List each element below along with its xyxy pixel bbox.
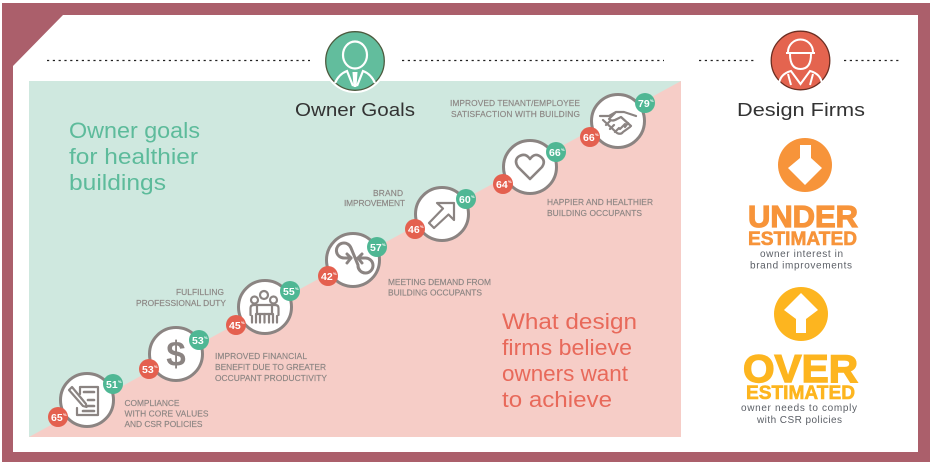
label: compliance: COMPLIANCE (124, 398, 180, 408)
goal 3: professional duty: 55 (283, 286, 295, 298)
label: happier occupants: BUILDING OCCUPANTS (547, 208, 642, 218)
label: professional duty: PROFESSIONAL DUTY (136, 298, 226, 308)
label: financial benefit (215, 351, 327, 383)
goal 2: financial benefit (139, 328, 209, 380)
text: what design firms believe owners want to achieve (502, 309, 637, 412)
heading: Owner Goals: Owner Goals (295, 99, 415, 120)
label: tenant satisfaction: SATISFACTION WITH BUILDING (451, 109, 580, 119)
goal 3: professional duty: 45 (229, 320, 241, 332)
callout: overestimated: OVER (743, 348, 858, 391)
panel: design firm beliefs diagonal (29, 81, 681, 437)
label: financial benefit: IMPROVED FINANCIAL (215, 351, 307, 361)
goal 6: happier occupants: 66 (549, 147, 561, 159)
callout: overestimated (741, 348, 858, 426)
label: happier occupants (547, 197, 653, 218)
label: meeting demand: BUILDING OCCUPANTS (388, 288, 482, 298)
goal 6: happier occupants: % (561, 147, 565, 152)
goal 3: professional duty: % (241, 320, 245, 325)
goal 6: happier occupants: % (508, 179, 512, 184)
label: meeting demand: MEETING DEMAND FROM (388, 277, 491, 287)
label: happier occupants: HAPPIER AND HEALTHIER (547, 197, 653, 207)
goal 3: professional duty (226, 280, 300, 335)
callout: underestimated: UNDER (748, 199, 858, 234)
goal 5: brand improvement: 60 (459, 194, 471, 206)
goal 5: brand improvement: % (420, 224, 424, 229)
heading: Design Firms: Design Firms (737, 99, 865, 120)
goal 2: financial benefit: 53 (192, 335, 204, 347)
goal 4: meeting demand (318, 234, 387, 286)
text: what design firms believe owners want to achieve: What design (502, 309, 637, 334)
label: tenant satisfaction (450, 98, 580, 119)
callout: overestimated: ESTIMATED (746, 383, 855, 404)
text: what design firms believe owners want to achieve: to achieve (502, 387, 612, 412)
goal 7: tenant satisfaction: 79 (638, 98, 650, 110)
goal 2: financial benefit: % (204, 335, 208, 340)
icon: yellow up arrow (774, 287, 828, 341)
label: professional duty (136, 287, 226, 308)
callout: underestimated (748, 199, 858, 272)
label: brand improvement (344, 188, 405, 208)
callout: overestimated: owner needs to comply (741, 403, 857, 414)
goal 5: brand improvement: % (471, 194, 475, 199)
goal 7: tenant satisfaction: % (595, 132, 599, 137)
goal 5: brand improvement: 46 (408, 224, 420, 236)
dotted rule: left of design icon (699, 60, 757, 62)
goal 6: happier occupants: 64 (496, 179, 508, 191)
label: brand improvement: IMPROVEMENT (344, 198, 405, 208)
text: owner goals for healthier buildings: buildings (69, 170, 166, 195)
goal 5: brand improvement (405, 188, 476, 240)
text: what design firms believe owners want to achieve: firms believe (502, 335, 632, 360)
label: tenant satisfaction: IMPROVED TENANT/EMPLOYEE (450, 98, 580, 108)
goal 2: financial benefit: 53 (142, 364, 154, 376)
text: owner goals for healthier buildings: Owner goals (69, 118, 200, 143)
goal 1: compliance: % (118, 379, 122, 384)
label: meeting demand (388, 277, 491, 298)
goal 7: tenant satisfaction: 66 (583, 132, 595, 144)
text: owner goals for healthier buildings: for healthier (69, 144, 198, 169)
label: professional duty: FULFILLING (176, 287, 224, 297)
goal 4: meeting demand: % (333, 271, 337, 276)
callout: underestimated: ESTIMATED (748, 229, 857, 250)
label: financial benefit: BENEFIT DUE TO GREATER (215, 362, 326, 372)
icon: design firm worker (771, 31, 830, 90)
callout: underestimated: owner interest in (760, 249, 843, 260)
callout: overestimated: with CSR policies (756, 415, 842, 426)
goal 3: professional duty: % (295, 286, 299, 291)
label: compliance: WITH CORE VALUES (124, 408, 209, 418)
goal 2: financial benefit: % (154, 364, 158, 369)
callout: underestimated: brand improvements (750, 260, 852, 272)
goal 4: meeting demand: 42 (321, 271, 333, 283)
goal 7: tenant satisfaction (580, 93, 655, 148)
goal 4: meeting demand: 57 (370, 242, 382, 254)
goal 1: compliance: 65 (51, 412, 63, 424)
text: owner goals for healthier buildings (69, 118, 200, 195)
goal 1: compliance: % (63, 412, 67, 417)
label: compliance: AND CSR POLICIES (124, 419, 203, 429)
label: financial benefit: OCCUPANT PRODUCTIVITY (215, 373, 327, 383)
text: what design firms believe owners want to achieve: owners want (502, 361, 628, 386)
goal 7: tenant satisfaction: % (650, 98, 654, 103)
goal 1: compliance (48, 374, 123, 427)
label: brand improvement: BRAND (373, 188, 403, 198)
dotted rule: right of owner icon (402, 60, 664, 62)
panel: owner goals background (29, 81, 681, 437)
label: compliance (124, 398, 209, 429)
goal 2: financial benefit: $ (166, 335, 186, 374)
goal 6: happier occupants (493, 140, 566, 194)
goal 4: meeting demand: % (382, 242, 386, 247)
goal 1: compliance: 51 (106, 379, 118, 391)
icon: owner businessperson (323, 29, 387, 93)
dotted rule: left of owner icon (47, 60, 310, 62)
dotted rule: right of design icon (844, 60, 902, 62)
icon: orange down arrow (778, 138, 832, 192)
